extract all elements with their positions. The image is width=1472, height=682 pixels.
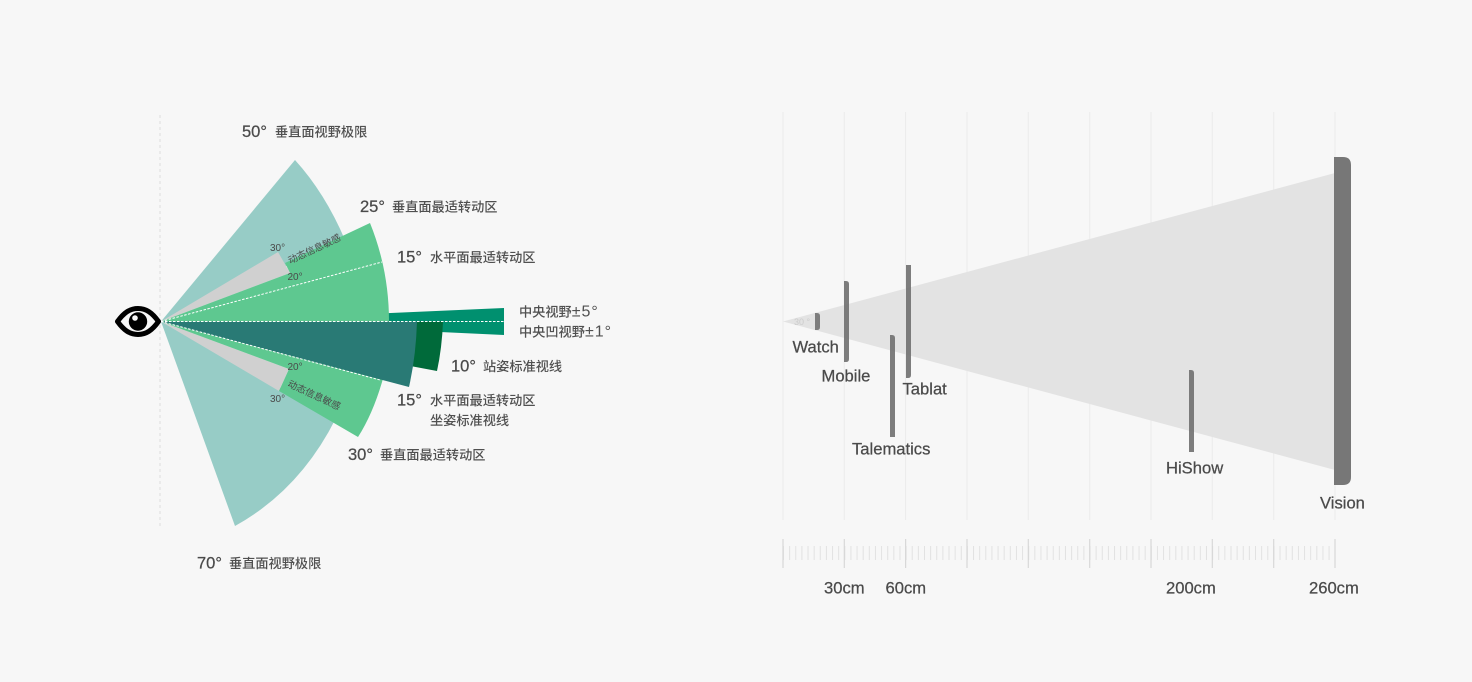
label: 50 degree vertical limit: 50°: [242, 123, 267, 141]
device bar: Vision: [1334, 157, 1351, 485]
label: lower 30 degree: 30°: [270, 394, 285, 405]
label: 15 degree horizontal comfortable lower: 15°: [397, 392, 422, 410]
sector: 70 degree lower vertical limit: [161, 322, 336, 526]
label: 30 degree vertical comfortable: 垂直面最适转动区: [380, 446, 486, 462]
label: 15 degree horizontal comfortable: [397, 248, 536, 266]
ruler label: 260cm: 260cm: [1309, 578, 1359, 598]
label: central vision: 中央视野±5°: [519, 304, 599, 320]
label: 30 degree vertical comfortable: [348, 446, 486, 464]
label: 70 degree vertical limit: 垂直面视野极限: [229, 555, 321, 571]
label: Vision: Vision: [1320, 494, 1365, 512]
label: 50 degree vertical limit: 垂直面视野极限: [275, 124, 367, 140]
sector: upper dynamic sensitive grey: [161, 252, 290, 322]
ruler: [783, 539, 1335, 568]
label: 15 degree horizontal comfortable: 水平面最适转动区: [430, 250, 536, 265]
device bar: Talematics: [890, 335, 895, 437]
label: upper dynamic information sensitive: 动态信息敏感: [286, 232, 343, 267]
band: central vision: [385, 308, 504, 335]
label: 70 degree vertical limit: [197, 554, 321, 572]
sector: standing line of sight: [405, 322, 443, 371]
label: Mobile: Mobile: [822, 366, 870, 386]
label: 30 degree cone angle: 30 °: [794, 317, 811, 327]
label: 10 degree standing sight line: 站姿标准视线: [483, 359, 562, 374]
sector: upper and horizontal comfortable rotation zone: [161, 223, 389, 322]
label: upper 30 degree: 30°: [270, 243, 285, 254]
sector: 50 degree upper vertical limit: [161, 160, 345, 322]
label: 50 degree vertical limit: [242, 123, 367, 141]
label: 25 degree vertical comfortable: 垂直面最适转动区: [392, 198, 498, 214]
dashed sight lines: [161, 262, 504, 380]
label: foveal vision: 中央凹视野±1°: [519, 324, 612, 340]
chart: viewing distance cone: [783, 173, 1335, 470]
label: lower dynamic information sensitive: 动态信息敏感: [286, 378, 343, 413]
label: 10 degree standing sight line: [451, 358, 562, 376]
label: Tablat: Tablat: [902, 380, 947, 398]
label: 70 degree vertical limit: 70°: [197, 554, 222, 572]
ruler label: 60cm: 60cm: [886, 578, 926, 598]
label: 30 degree vertical comfortable: 30°: [348, 446, 373, 464]
sector: lower dynamic sensitive grey: [161, 322, 289, 391]
sector: seated line of sight: [161, 322, 417, 387]
icon: eye: [118, 308, 158, 334]
label: HiShow: HiShow: [1166, 458, 1224, 478]
ruler label: 200cm: 200cm: [1166, 578, 1216, 598]
device bar: HiShow: [1189, 370, 1194, 452]
device bar: Mobile: [844, 281, 849, 362]
label: 15 degree horizontal comfortable: 15°: [397, 248, 422, 266]
label: 15 degree horizontal comfortable lower: 水平面最适转动区: [430, 393, 536, 408]
ruler label: 30cm: 30cm: [824, 578, 865, 598]
label: 25 degree vertical comfortable: 25°: [360, 198, 385, 216]
label: upper 20 degree: 20°: [288, 272, 303, 283]
label: lower 20 degree: 20°: [288, 362, 303, 373]
label: Watch: Watch: [792, 338, 839, 356]
device bar: Watch: [815, 313, 820, 330]
label: Talematics: Talematics: [852, 440, 930, 458]
label: 25 degree vertical comfortable: [360, 198, 498, 216]
device bar: Tablat: [906, 265, 911, 378]
label: 10 degree standing sight line: 10°: [451, 358, 476, 376]
label: 15 degree horizontal comfortable lower: 坐姿标准视线: [430, 413, 509, 428]
label: 15 degree horizontal comfortable lower: [397, 392, 536, 428]
sector: lower comfortable rotation zone: [161, 322, 384, 437]
chart: visual field sectors: [161, 160, 504, 526]
